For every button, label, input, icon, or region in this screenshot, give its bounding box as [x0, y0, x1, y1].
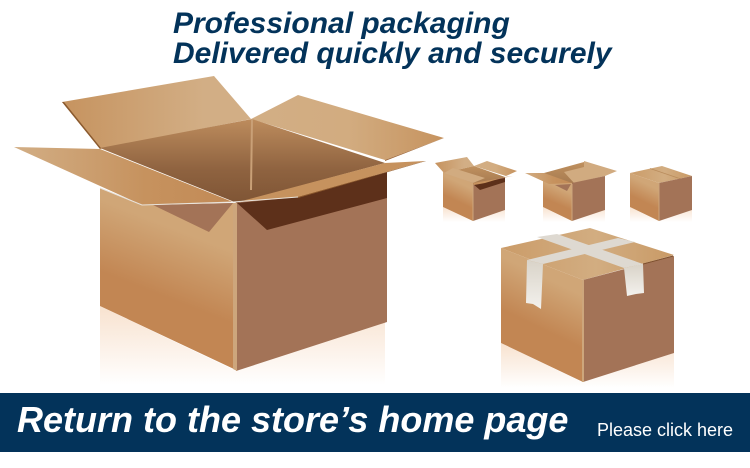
front right flap [238, 161, 425, 202]
shadow under left flap [153, 203, 233, 232]
dark shadow under right flap [237, 172, 387, 230]
reflection [100, 306, 385, 385]
white flap edges [100, 188, 298, 205]
footer banner [0, 393, 750, 452]
reflection [543, 207, 605, 222]
headline: Professional packaging [173, 7, 510, 40]
banner heading: Return to the store’s home page [17, 399, 568, 440]
corner edge [233, 203, 237, 371]
right face [583, 256, 674, 382]
reflection [630, 207, 692, 222]
left face [100, 188, 236, 370]
back right flap [251, 95, 444, 160]
taped closed box D [501, 228, 674, 388]
reflection [443, 207, 505, 222]
small half-open box B [525, 161, 617, 222]
headline [173, 7, 613, 70]
front left flap [14, 147, 233, 205]
back left flap [62, 76, 251, 149]
large open box [14, 76, 444, 385]
left face [501, 248, 583, 382]
small closed box C [630, 166, 692, 222]
right face [236, 173, 387, 371]
reflection [501, 343, 674, 388]
box top [501, 228, 674, 280]
banner link text: Please click here [597, 420, 733, 440]
headline: Delivered quickly and securely [173, 37, 612, 70]
tape strips [537, 234, 643, 268]
box interior [100, 119, 385, 203]
small open box A [435, 157, 517, 222]
